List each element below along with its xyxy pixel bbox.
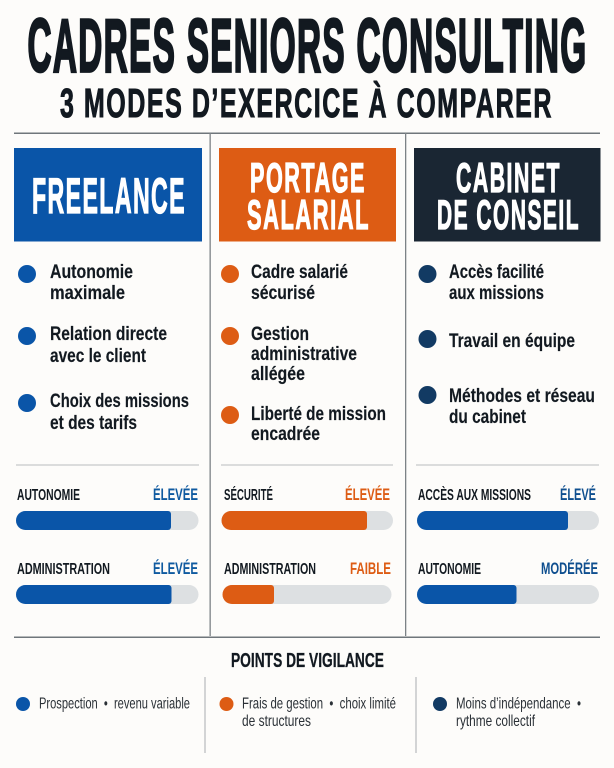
cabinet benefits: [418, 262, 595, 428]
vigilance: portage: Frais de gestion • choix limité: [242, 696, 396, 712]
freelance gauge: administration: ÉLEVÉE: [153, 559, 198, 578]
portage gauge: administration: FAIBLE: [350, 559, 391, 578]
vigilance: portage: de structures: [242, 713, 311, 730]
freelance header: FREELANCE: [32, 168, 186, 224]
freelance gauge: administration: [16, 559, 198, 604]
panel: freelance: [14, 148, 202, 604]
panel: cabinet de conseil: [414, 148, 600, 604]
portage benefits: Cadre salarié: [251, 262, 348, 283]
heading: points de vigilance: POINTS DE VIGILANCE: [231, 649, 384, 672]
portage benefits: [221, 262, 386, 445]
portage benefits: Liberté de mission: [251, 404, 386, 425]
portage gauge: securite: SÉCURITÉ: [224, 485, 273, 504]
freelance benefits: maximale: [50, 283, 125, 304]
portage gauge: administration: ADMINISTRATION: [224, 561, 316, 578]
cabinet benefits: du cabinet: [449, 407, 527, 428]
cabinet gauge: autonomie: [417, 559, 599, 604]
portage header: SALARIAL: [247, 191, 370, 238]
freelance benefits: avec le client: [50, 346, 147, 367]
freelance gauge: autonomie: AUTONOMIE: [17, 487, 80, 504]
cabinet gauge: acces aux missions: ACCÈS AUX MISSIONS: [418, 485, 531, 504]
vigilance: freelance: Prospection • revenu variable: [39, 696, 190, 712]
freelance gauge: autonomie: [16, 485, 198, 530]
freelance gauge: administration: ADMINISTRATION: [17, 561, 110, 578]
portage benefits: encadrée: [251, 424, 320, 445]
cabinet benefits: Accès facilité: [449, 262, 544, 283]
panel: portage salarial: [219, 148, 396, 604]
portage benefits: allégée: [251, 364, 305, 385]
portage benefits: Gestion: [251, 324, 309, 345]
vigilance: cabinet: [433, 696, 581, 730]
portage benefits: sécurisé: [251, 283, 315, 304]
freelance benefits: Autonomie: [50, 262, 133, 283]
freelance benefits: Relation directe: [50, 324, 167, 345]
cabinet header: [414, 148, 600, 242]
portage benefits: administrative: [251, 344, 357, 365]
portage gauge: securite: ÉLEVÉE: [345, 485, 390, 504]
freelance benefits: Choix des missions: [50, 391, 189, 412]
freelance benefits: et des tarifs: [50, 413, 137, 434]
portage header: PORTAGE: [250, 154, 366, 201]
vigilance: freelance: [16, 696, 190, 712]
vigilance: cabinet: rythme collectif: [456, 713, 535, 730]
vigilance: portage: [220, 696, 396, 730]
cabinet benefits: Travail en équipe: [449, 331, 575, 352]
cabinet gauge: autonomie: AUTONOMIE: [418, 561, 481, 578]
freelance gauge: autonomie: ÉLEVÉE: [153, 485, 198, 504]
portage header: [219, 148, 396, 242]
cabinet benefits: aux missions: [449, 283, 544, 304]
freelance benefits: [18, 262, 189, 434]
cabinet gauge: acces aux missions: [417, 485, 599, 530]
portage gauge: administration: [222, 559, 392, 604]
portage gauge: securite: [222, 485, 393, 530]
freelance header: [14, 148, 202, 242]
